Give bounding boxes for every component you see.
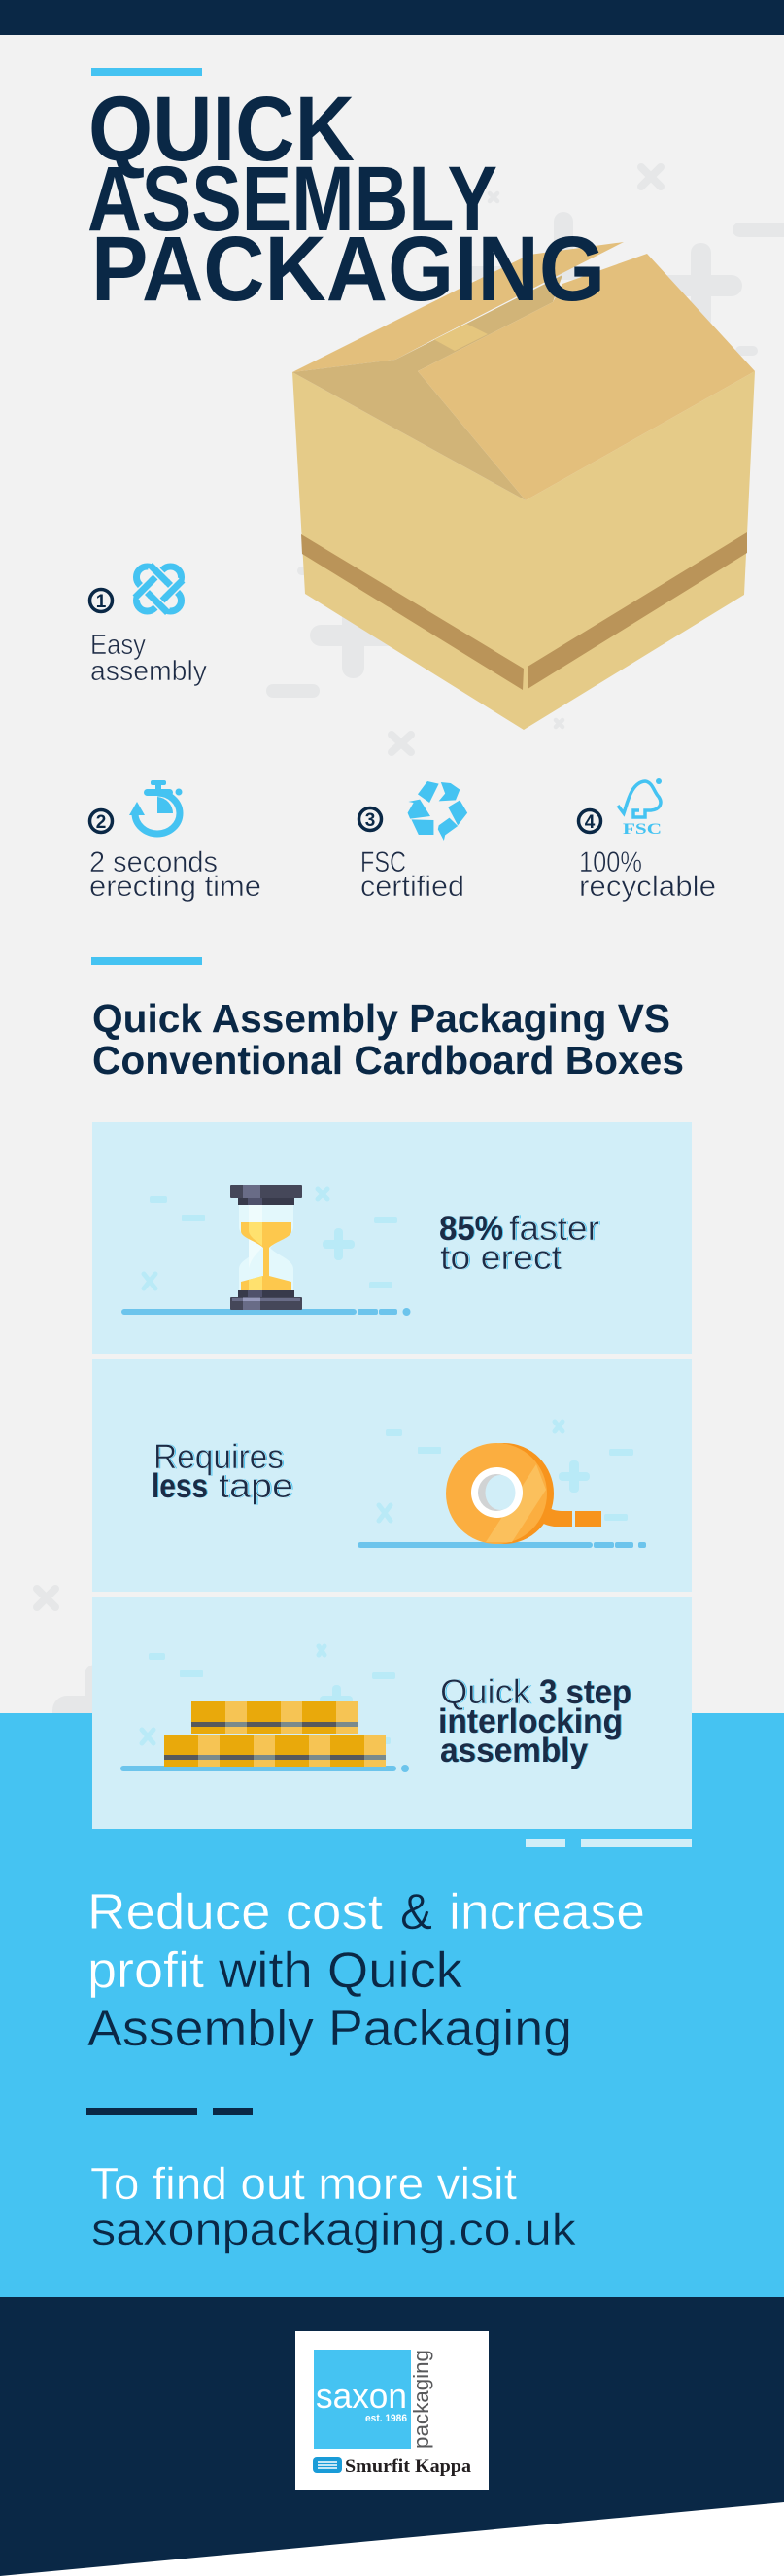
saxon logo square: est. 1986 xyxy=(365,2413,407,2424)
icon: stacked boxes xyxy=(164,1701,386,1767)
text: quick 3 step interlocking assembly: Quick xyxy=(440,1673,531,1711)
logo card xyxy=(295,2331,489,2490)
text: requires less tape: tape xyxy=(219,1467,293,1505)
call to action headline: profit xyxy=(87,1942,205,1999)
title: QUICK xyxy=(88,78,355,181)
label: 100% xyxy=(579,846,642,878)
icon: stopwatch xyxy=(129,780,183,834)
website call to action: To find out more visit xyxy=(90,2158,517,2209)
ground line xyxy=(120,1765,409,1772)
feature 2: erecting time xyxy=(89,780,261,903)
icon: FSC tree mark xyxy=(618,778,662,838)
panel: 85% faster xyxy=(92,1122,692,1354)
icon: hourglass xyxy=(230,1185,302,1310)
label: assembly xyxy=(90,656,207,687)
ground line xyxy=(358,1542,646,1548)
label xyxy=(89,846,261,903)
text: 85% faster to erect: faster xyxy=(509,1210,599,1248)
title: PACKAGING xyxy=(91,218,605,321)
blue lower background xyxy=(0,1713,784,2297)
call to action headline: Assembly Packaging xyxy=(87,2001,572,2057)
section heading: Conventional Cardboard Boxes xyxy=(92,1038,684,1082)
text: quick 3 step interlocking assembly: interlocking xyxy=(438,1702,623,1740)
section heading: Quick Assembly Packaging VS xyxy=(92,996,670,1041)
number badge 3: 3 xyxy=(365,810,375,831)
panel: quick 3 step interlocking assembly xyxy=(92,1597,692,1829)
saxon logo square: saxon xyxy=(316,2376,407,2416)
pale accent dashes xyxy=(526,1839,692,1847)
title: ASSEMBLY xyxy=(87,148,497,251)
text: requires less tape: less xyxy=(152,1467,208,1505)
panel: requires less tape xyxy=(92,1359,692,1592)
saxon logo square xyxy=(314,2350,411,2449)
call to action headline: Reduce cost xyxy=(87,1884,384,1941)
call to action headline: & xyxy=(400,1884,432,1941)
text: quick 3 step interlocking assembly: assembly xyxy=(440,1732,588,1769)
text: requires less tape: Requires xyxy=(153,1438,284,1476)
number badge 2: 2 xyxy=(96,812,106,833)
title xyxy=(87,78,605,321)
blue accent bar xyxy=(91,68,202,76)
ground line xyxy=(121,1308,410,1316)
call to action headline xyxy=(87,1884,645,2057)
number badge 4: 4 xyxy=(585,812,596,833)
text: 85% faster to erect xyxy=(439,1210,599,1277)
website call to action xyxy=(90,2158,577,2254)
navy dashes xyxy=(86,2108,253,2115)
label: certified xyxy=(360,871,464,903)
call to action headline: with Quick xyxy=(218,1942,463,1999)
label: erecting time xyxy=(89,871,261,903)
icon: interlocking links xyxy=(132,562,186,616)
text: requires less tape xyxy=(152,1438,293,1505)
label xyxy=(360,846,464,903)
text: quick 3 step interlocking assembly: 3 step xyxy=(539,1673,631,1711)
feature 3: FSC certified xyxy=(359,781,467,903)
call to action headline: increase xyxy=(449,1884,645,1941)
feature 4: recyclable xyxy=(579,778,716,903)
label: 2 seconds xyxy=(89,846,218,878)
label xyxy=(90,630,207,687)
text: 85% faster to erect: to erect xyxy=(440,1239,562,1277)
top navy bar xyxy=(0,0,784,35)
number badge 4 xyxy=(579,810,600,833)
blue accent bar xyxy=(91,957,202,965)
feature 1: easy assembly xyxy=(89,562,207,687)
number badge 2 xyxy=(89,810,113,833)
white footer corner xyxy=(0,2502,784,2576)
label: FSC xyxy=(360,846,406,878)
icon: FSC tree mark: FSC xyxy=(623,821,662,838)
label xyxy=(579,846,716,903)
Smurfit Kappa logo: Smurfit Kappa xyxy=(345,2456,472,2477)
icon: recycling arrows xyxy=(408,781,467,841)
number badge 1: 1 xyxy=(96,592,107,612)
navy footer xyxy=(0,2297,784,2576)
label: Easy xyxy=(90,630,146,661)
vertical wordmark: packaging xyxy=(409,2350,433,2449)
icon: tape roll xyxy=(446,1443,601,1544)
section heading xyxy=(92,996,684,1082)
text: quick 3 step interlocking assembly xyxy=(438,1673,631,1769)
illustration: cardboard box xyxy=(292,242,755,730)
text: 85% faster to erect: 85% xyxy=(439,1210,503,1248)
website call to action: saxonpackaging.co.uk xyxy=(91,2204,577,2254)
label: recyclable xyxy=(579,871,716,903)
